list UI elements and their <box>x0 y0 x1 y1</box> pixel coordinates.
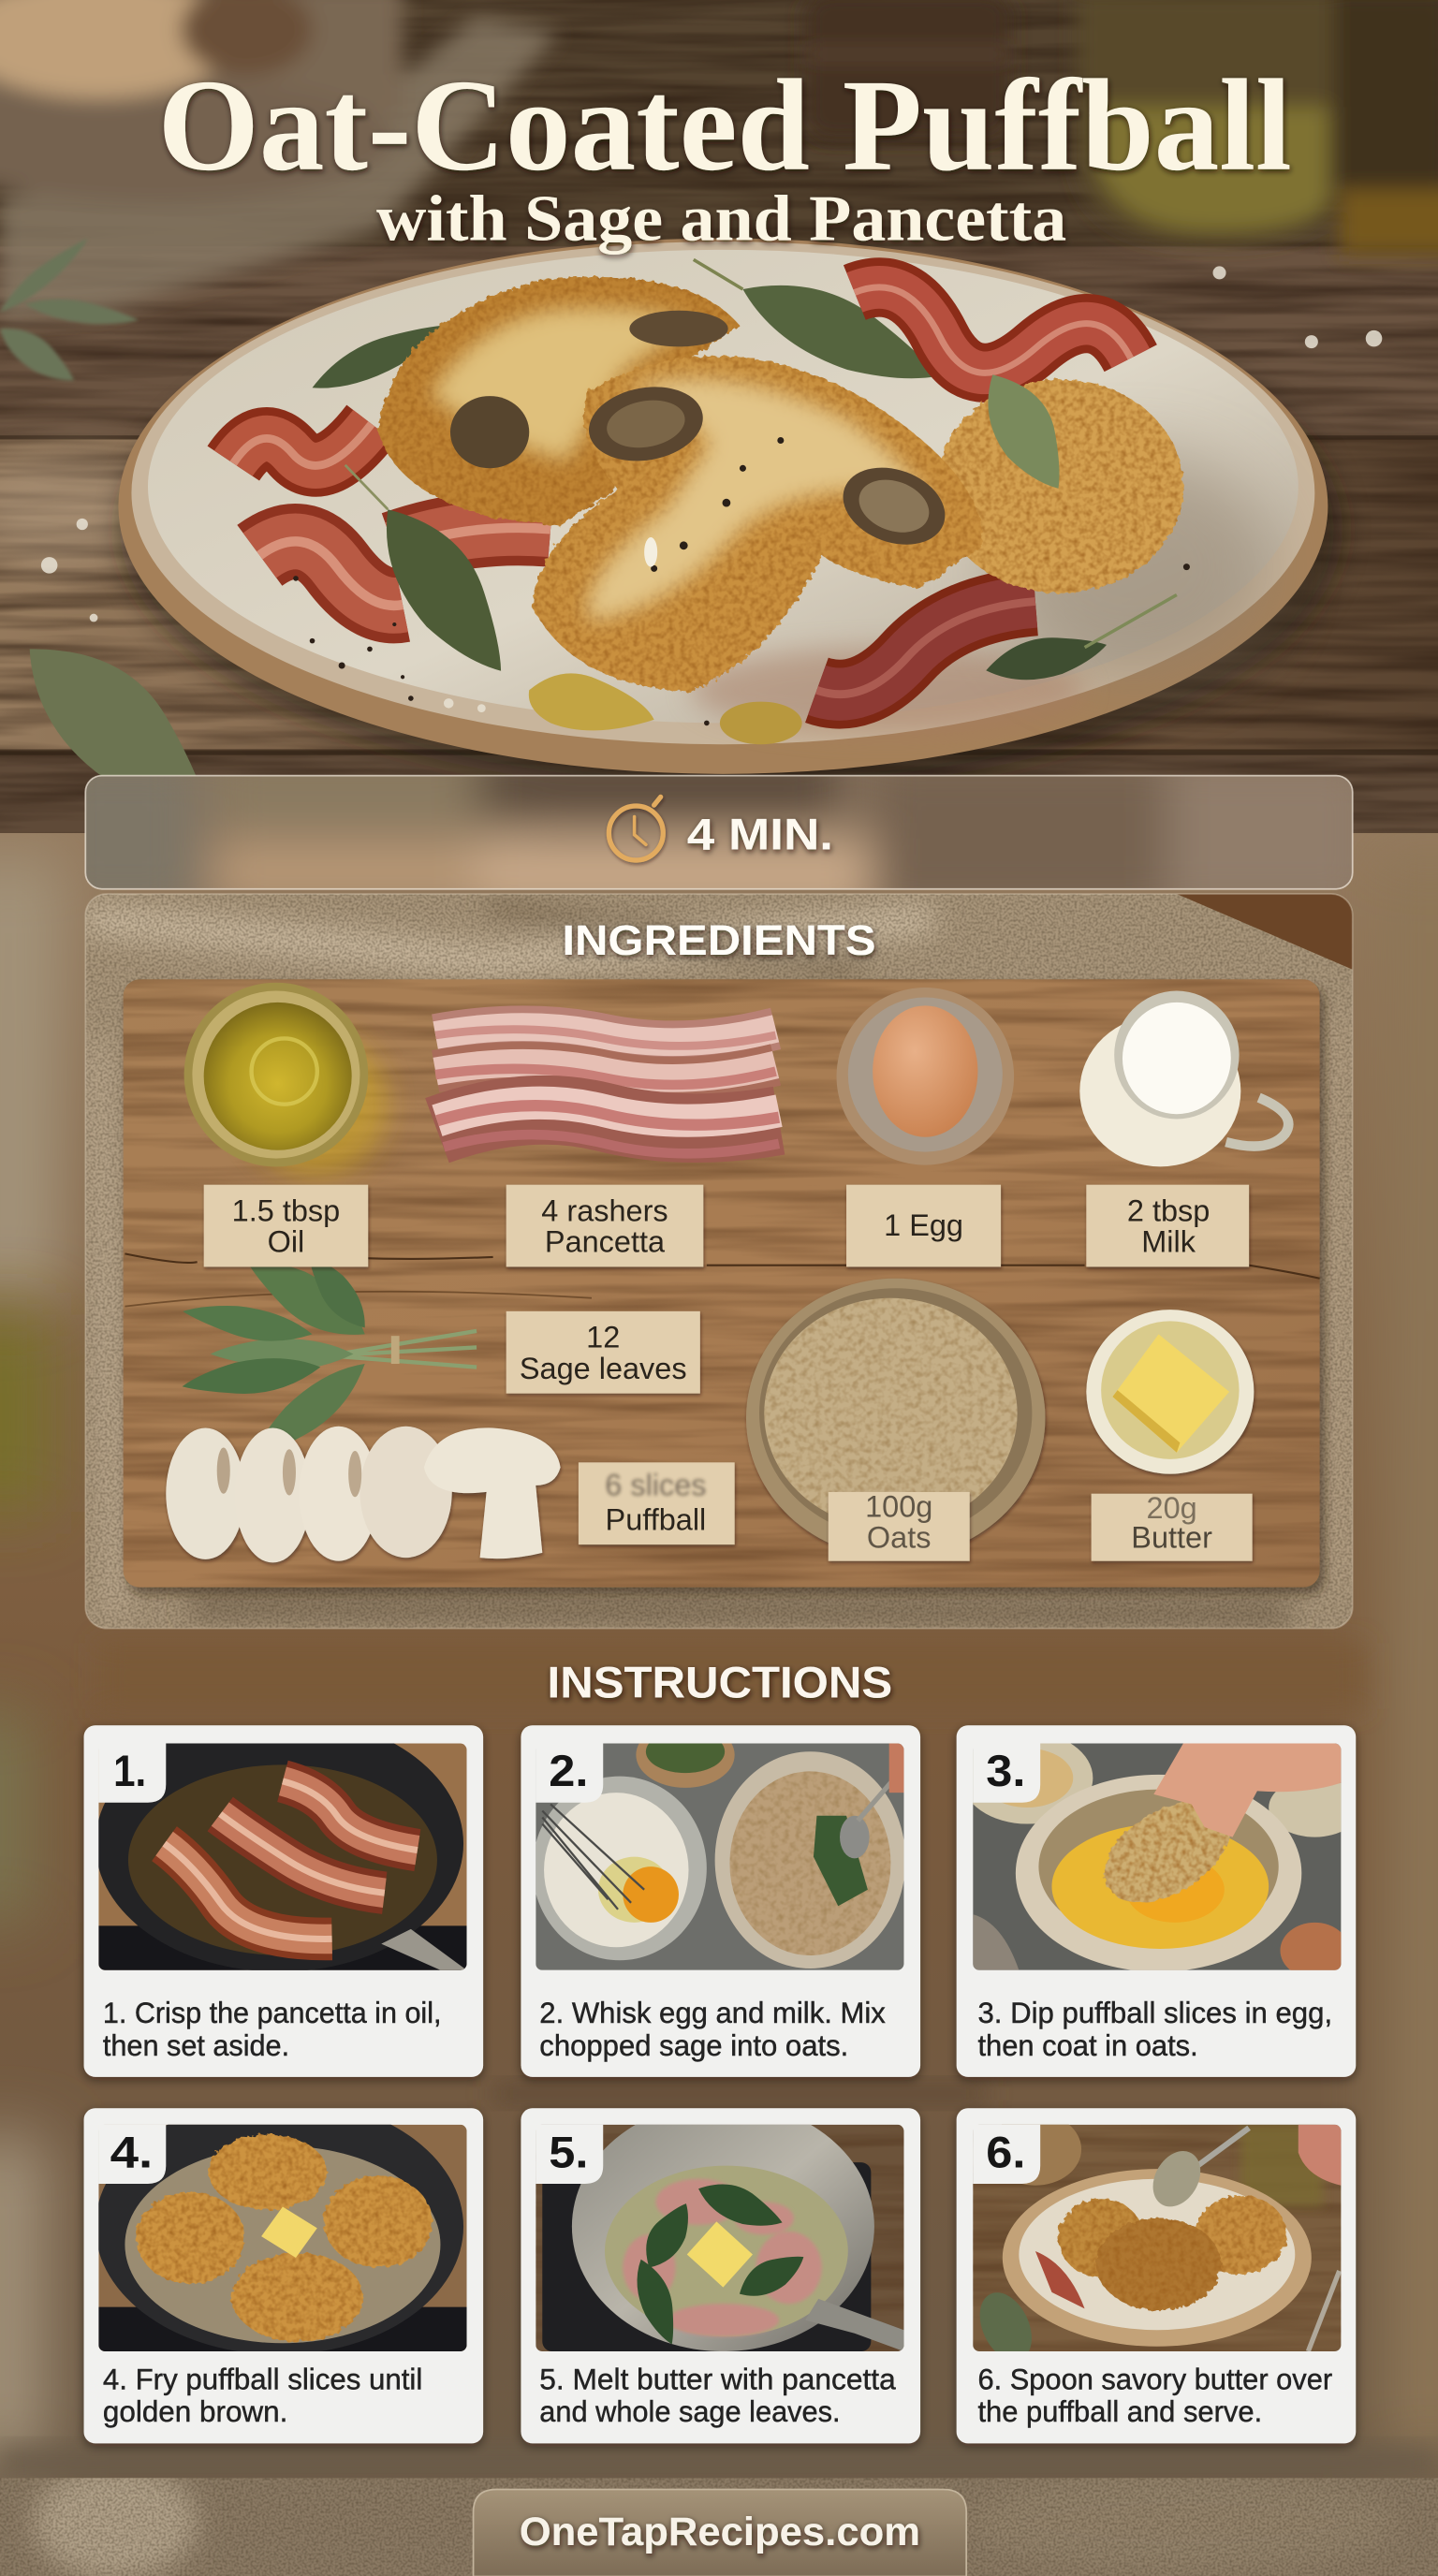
step 4 text: 4. Fry puffball slices until <box>103 2362 422 2395</box>
blurred pepper mill and oil bottle <box>805 0 1438 255</box>
footer website badge <box>474 2489 966 2576</box>
heading: instructions: INSTRUCTIONS <box>548 1658 892 1707</box>
step 6 text <box>977 2362 1332 2428</box>
rear fritters <box>378 277 1183 593</box>
step 1 text <box>103 1996 442 2062</box>
step 5 text: 5. Melt butter with pancetta <box>539 2362 896 2395</box>
heading: ingredients: INGREDIENTS <box>562 916 876 964</box>
ingredient labels: Butter <box>1131 1521 1212 1555</box>
ingredient labels: Oil <box>268 1225 304 1259</box>
step 4 text: golden brown. <box>103 2394 287 2428</box>
step 6 number <box>973 2125 1040 2184</box>
ingredient labels <box>204 1185 1253 1561</box>
step 2 text <box>539 1996 886 2062</box>
step 1 number <box>98 1744 166 1803</box>
panel: ingredients <box>85 894 1353 1629</box>
ingredient labels: 20g <box>1147 1491 1197 1525</box>
step 2 image: egg wash and oats <box>533 1722 905 1970</box>
cutting board <box>124 979 1325 1594</box>
step 1 text: then set aside. <box>103 2028 289 2062</box>
step 3 number: 3. <box>986 1747 1025 1796</box>
footer website badge: OneTapRecipes.com <box>520 2510 920 2554</box>
step 2 number <box>536 1744 603 1803</box>
step 5 text: and whole sage leaves. <box>539 2394 841 2428</box>
ingredient labels: 1 Egg <box>884 1208 963 1242</box>
step 6 number: 6. <box>986 2128 1025 2177</box>
ingredient: butter dish <box>1086 1310 1254 1474</box>
blurred background bowl with bread <box>0 0 559 320</box>
step 1 card <box>84 1716 483 2077</box>
icon: clock <box>609 797 663 860</box>
ingredient labels: Oats <box>867 1521 932 1555</box>
step 3 number <box>973 1744 1040 1803</box>
time bar: frosted glass panel <box>50 756 1372 912</box>
step 2 text: 2. Whisk egg and milk. Mix <box>539 1996 886 2029</box>
step 4 text <box>103 2362 422 2428</box>
footer linen strip <box>0 2465 1438 2576</box>
step 3 card <box>957 1725 1360 2077</box>
hero photo: plated puffball on rustic table <box>0 0 1438 843</box>
ingredient: oil <box>184 983 388 1177</box>
main mushroom-shaped fritter <box>533 356 983 692</box>
ingredient: egg <box>837 988 1014 1165</box>
step 4 image: frying fritters <box>95 2099 467 2355</box>
bacon pieces <box>233 287 1131 695</box>
sprig of sage at left <box>0 240 138 382</box>
linen cloth <box>85 894 1353 1629</box>
step 6 text: 6. Spoon savory butter over <box>977 2362 1332 2395</box>
step 1 image: pancetta in pan <box>95 1716 467 1972</box>
step 3 text: 3. Dip puffball slices in egg, <box>977 1996 1332 2029</box>
step 2 text: chopped sage into oats. <box>539 2028 848 2062</box>
ingredient: oats bowl <box>746 1279 1045 1558</box>
title: Oat-Coated Puffball <box>158 53 1292 198</box>
ingredient labels: 1.5 tbsp <box>232 1193 340 1227</box>
plate <box>118 239 1343 792</box>
ingredient: puffball slices <box>166 1427 561 1562</box>
step 5 image: butter in saucepan <box>536 2101 903 2351</box>
step 3 image: dipping slice in egg <box>961 1732 1360 1979</box>
ingredient: milk jug <box>1079 991 1288 1166</box>
ingredient labels: Pancetta <box>545 1225 666 1259</box>
background sage leaves <box>313 258 932 388</box>
butter sauce pools <box>529 673 802 744</box>
ingredient labels: 2 tbsp <box>1127 1193 1210 1227</box>
front sage leaves <box>0 360 1177 843</box>
ingredient labels: 12 <box>586 1320 620 1354</box>
table planks <box>0 0 1438 833</box>
salt and pepper specks <box>41 266 1382 725</box>
step 1 number: 1. <box>113 1747 146 1796</box>
ingredient labels: 6 slices <box>605 1468 707 1501</box>
ingredient: pancetta <box>435 1027 779 1153</box>
step 5 text <box>539 2362 896 2428</box>
step 6 image: serving plate <box>970 2113 1341 2369</box>
step 3 text: then coat in oats. <box>977 2028 1198 2062</box>
step 6 text: the puffball and serve. <box>977 2394 1262 2428</box>
step 5 number: 5. <box>549 2128 588 2177</box>
step 4 number: 4. <box>110 2128 153 2177</box>
ingredient labels: 100g <box>865 1489 932 1523</box>
ingredient labels: Milk <box>1141 1225 1196 1259</box>
step 5 number <box>536 2125 603 2184</box>
time label: 4 MIN. <box>687 811 833 860</box>
ingredient labels: Sage leaves <box>520 1352 687 1385</box>
step 2 card <box>521 1722 920 2077</box>
step 4 number <box>98 2125 166 2184</box>
step 5 card <box>521 2101 920 2443</box>
ingredient labels: 4 rashers <box>541 1193 668 1227</box>
subtitle: with Sage and Pancetta <box>376 182 1066 255</box>
background: blurred brown backdrop <box>0 833 1438 2480</box>
step 3 text <box>977 1996 1332 2062</box>
ingredient labels: Puffball <box>606 1502 706 1536</box>
step 2 number: 2. <box>549 1747 588 1796</box>
step 6 card <box>957 2108 1356 2443</box>
step 4 card <box>84 2099 483 2443</box>
ingredient: sage bundle <box>180 1241 477 1473</box>
step 1 text: 1. Crisp the pancetta in oil, <box>103 1996 442 2029</box>
